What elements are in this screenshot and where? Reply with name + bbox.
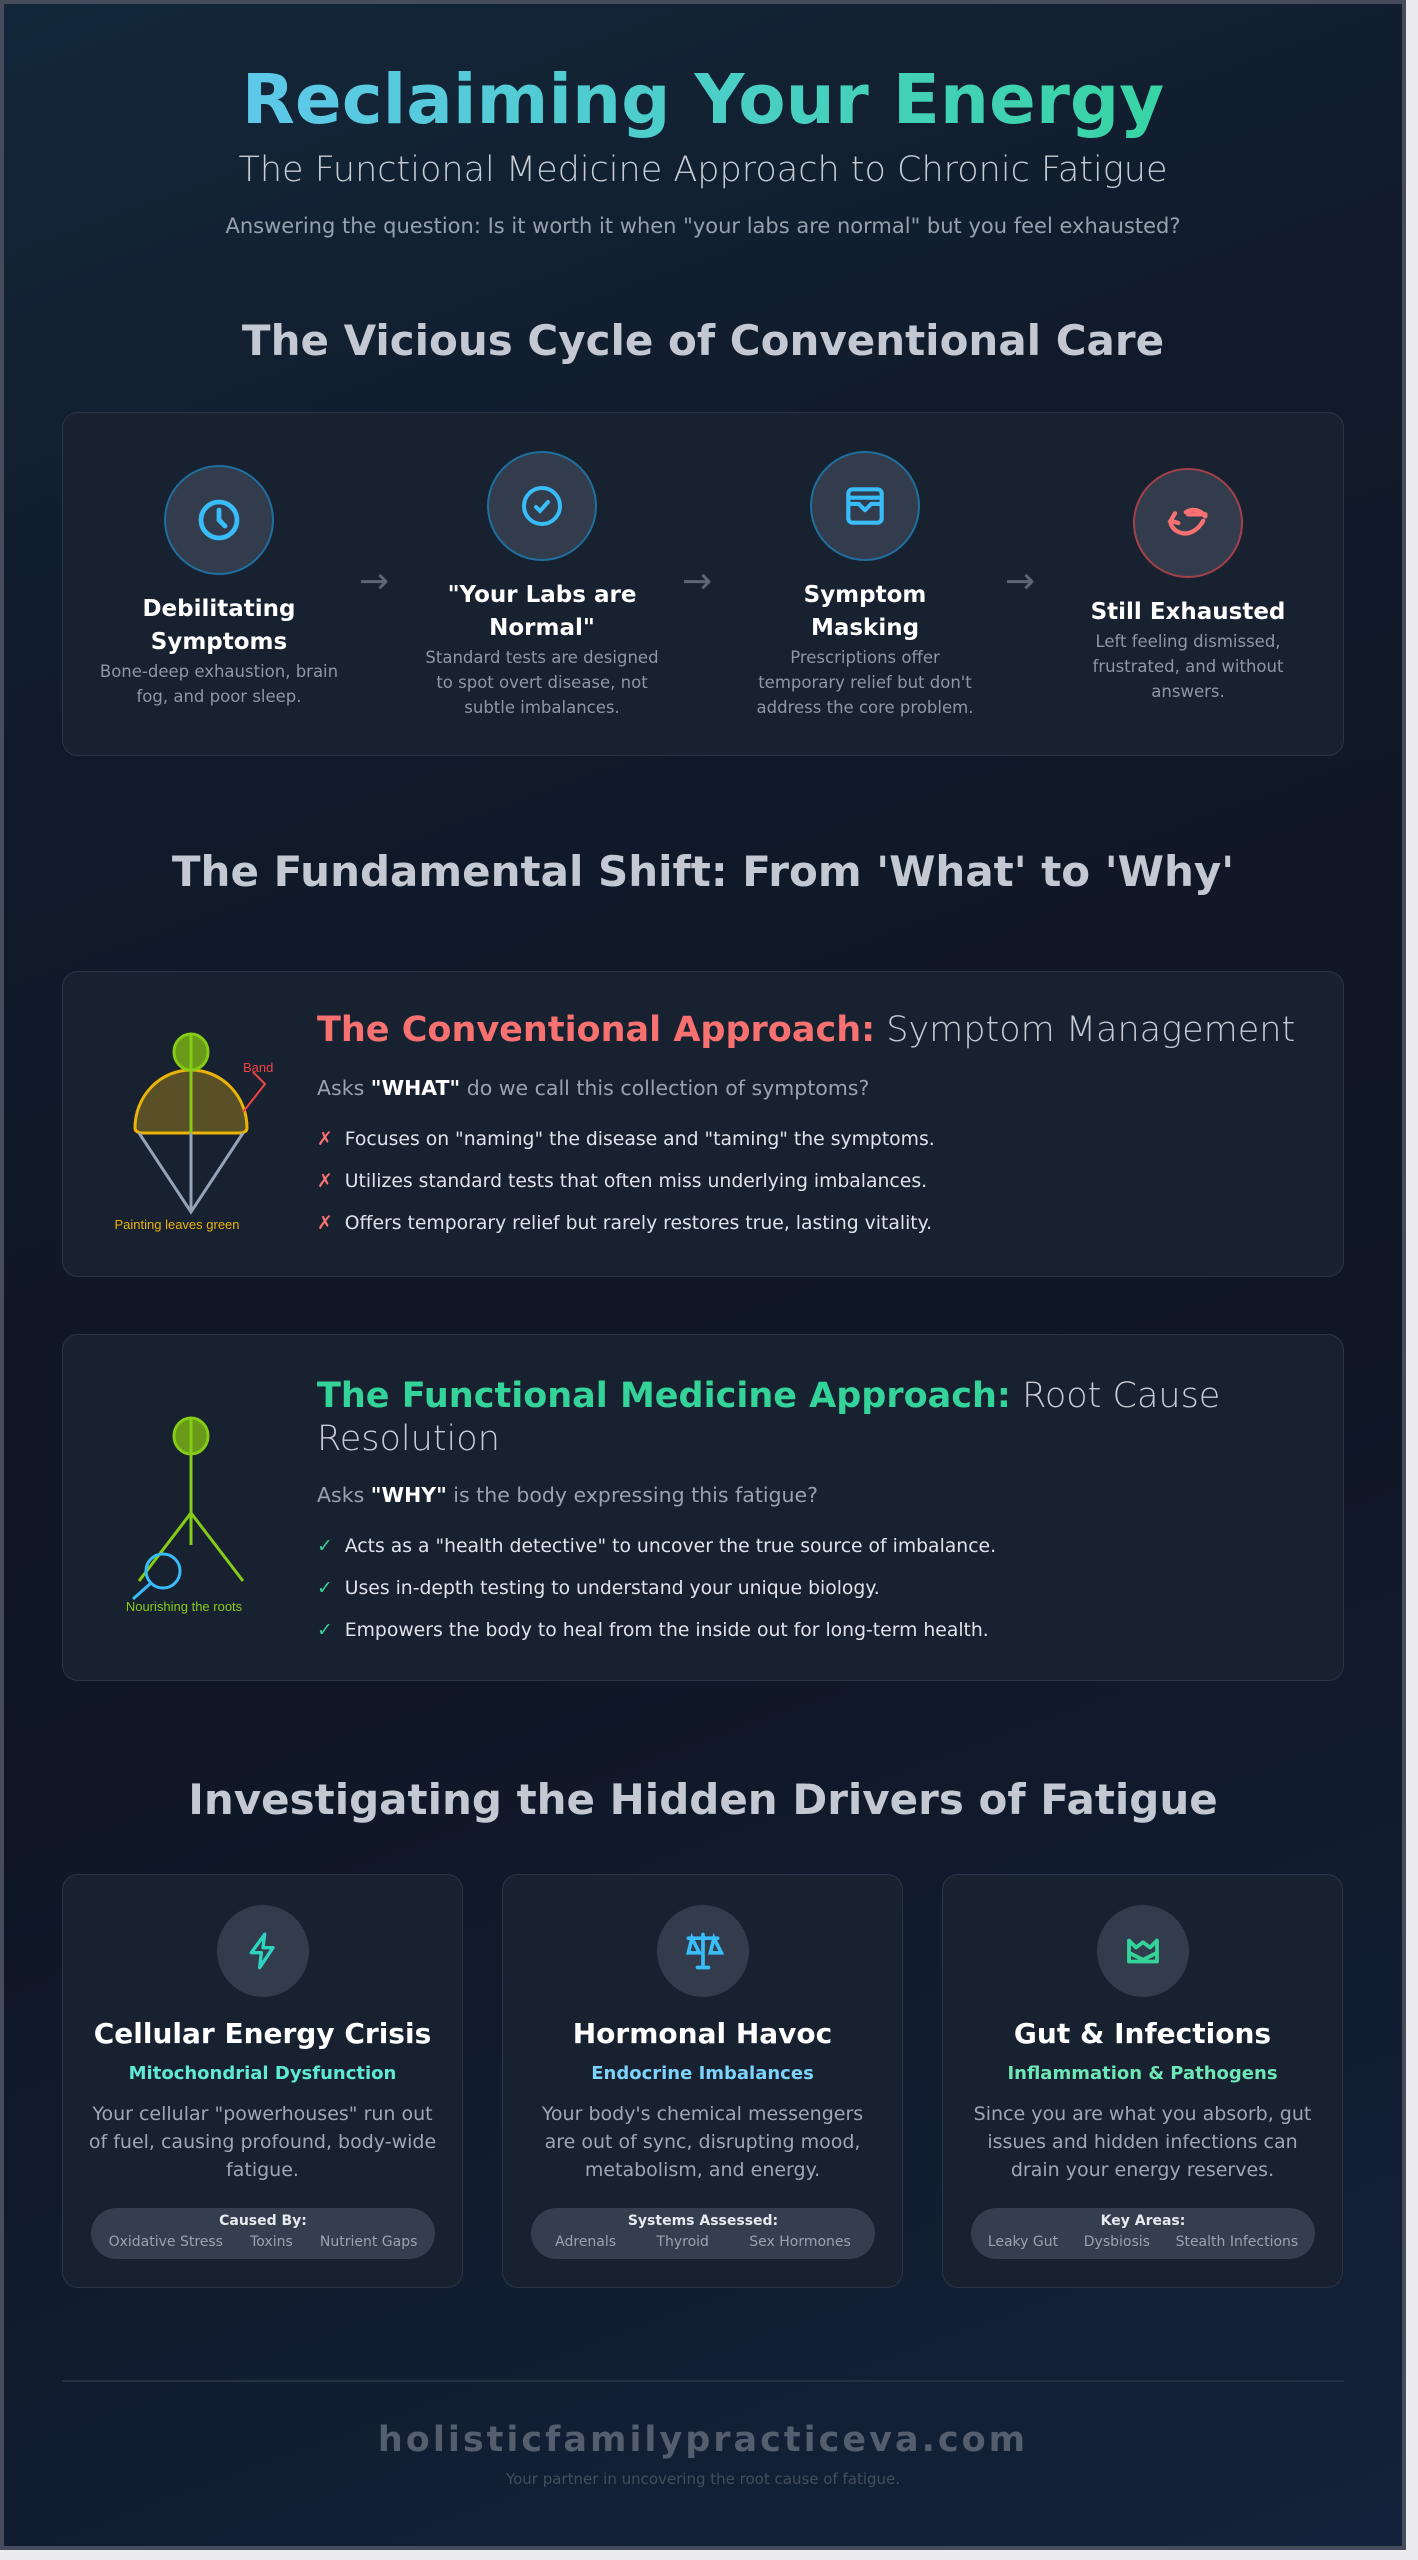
icon: wallet: [810, 451, 920, 561]
card: hormonal: Your body's chemical messengers are out of sync, disrupting mood, metabolism, and energy.: [542, 2103, 863, 2181]
step 2: Normal": [489, 615, 595, 641]
card: gut: Inflammation & Pathogens: [1007, 2063, 1278, 2084]
arrow 3: →: [1005, 561, 1035, 602]
pill: systems: Thyroid: [656, 2234, 709, 2250]
title: Reclaiming Your Energy: [242, 60, 1164, 140]
bullet list: ✓ Uses in-depth testing to understand your unique biology.: [317, 1578, 880, 1599]
footer domain: holisticfamilypracticeva.com: [378, 2420, 1028, 2460]
illustration: painted tree: Painting leaves green: [114, 1217, 240, 1232]
question: Asks "WHAT" do we call this collection of symptoms?: [317, 1076, 869, 1100]
pill: systems: Sex Hormones: [749, 2234, 851, 2250]
illustration: painted tree: [114, 1032, 273, 1232]
bullet list: [317, 1129, 935, 1234]
icon: cycle: [1133, 468, 1243, 578]
icon: bolt: [216, 1905, 308, 1997]
heading: The Functional Medicine Approach: Root Cause Resolution: [317, 1376, 1220, 1459]
pill: systems: Adrenals: [555, 2234, 616, 2250]
arrow 2: →: [682, 561, 712, 602]
subtitle: The Functional Medicine Approach to Chronic Fatigue: [238, 150, 1168, 190]
bullet list: [317, 1536, 996, 1641]
bullet list: ✗ Offers temporary relief but rarely restores true, lasting vitality.: [317, 1213, 932, 1234]
card: gut: Since you are what you absorb, gut issues and hidden infections can drain your energy reserves.: [974, 2103, 1311, 2181]
icon: scale: [656, 1905, 748, 1997]
card: hormonal: Endocrine Imbalances: [591, 2063, 814, 2084]
pill: key areas: Key Areas:: [1101, 2213, 1185, 2229]
illustration: nourished roots: [126, 1416, 244, 1614]
step 4: Still Exhausted: [1091, 599, 1285, 625]
step 3: Prescriptions offer: [790, 648, 940, 667]
bullet list: ✗ Focuses on "naming" the disease and "taming" the symptoms.: [317, 1129, 935, 1150]
card: gut: [942, 1874, 1343, 2288]
step 3: address the core problem.: [757, 698, 973, 717]
pill: key areas: Stealth Infections: [1176, 2234, 1298, 2250]
step 2: "Your Labs are: [448, 582, 636, 608]
pill: systems: [531, 2208, 875, 2259]
step 3: temporary relief but don't: [758, 673, 972, 692]
panel: functional approach: [62, 1334, 1344, 1681]
bullet list: ✓ Empowers the body to heal from the inside out for long-term health.: [317, 1620, 989, 1641]
intro question: Answering the question: Is it worth it when "your labs are normal" but you feel exhausted?: [225, 214, 1181, 238]
step 4: [1091, 468, 1285, 701]
card: cellular energy: Your cellular "powerhouses" run out of fuel, causing profound, body-wide fatigue.: [89, 2103, 436, 2181]
card: cellular energy: [62, 1874, 463, 2288]
card: hormonal: [502, 1874, 903, 2288]
pill: key areas: [971, 2208, 1315, 2259]
panel: conventional approach: [62, 971, 1344, 1277]
step 2: Standard tests are designed to spot overt disease, not subtle imbalances.: [425, 648, 659, 717]
arrow 1: →: [359, 561, 389, 602]
step 2: [425, 451, 659, 717]
bullet list: ✓ Acts as a "health detective" to uncover the true source of imbalance.: [317, 1536, 996, 1557]
step 4: Left feeling dismissed, frustrated, and without answers.: [1093, 632, 1283, 701]
pill: causes: Nutrient Gaps: [320, 2234, 417, 2250]
heading: vicious cycle: The Vicious Cycle of Conventional Care: [242, 316, 1164, 365]
step 1: Symptoms: [151, 629, 287, 655]
pill: key areas: Leaky Gut: [988, 2234, 1058, 2250]
pill: causes: Toxins: [250, 2234, 293, 2250]
step 3: Masking: [811, 615, 919, 641]
pill: causes: Oxidative Stress: [109, 2234, 223, 2250]
icon: check: [487, 451, 597, 561]
icon: gut: [1096, 1905, 1188, 1997]
pill: causes: [91, 2208, 435, 2259]
illustration: nourished roots: Nourishing the roots: [126, 1599, 243, 1614]
step 3: Symptom: [804, 582, 926, 608]
pill: key areas: Dysbiosis: [1084, 2234, 1150, 2250]
pill: systems: Systems Assessed:: [628, 2213, 778, 2229]
illustration: painted tree: Band: [243, 1060, 273, 1075]
bullet list: ✗ Utilizes standard tests that often miss underlying imbalances.: [317, 1171, 927, 1192]
heading: The Conventional Approach: Symptom Management: [317, 1010, 1295, 1050]
icon: clock: [164, 465, 274, 575]
card: cellular energy: Mitochondrial Dysfunction: [129, 2063, 396, 2084]
step 1: Debilitating: [142, 596, 296, 622]
step 1: Bone-deep exhaustion, brain fog, and poor sleep.: [100, 662, 338, 706]
card: cellular energy: Cellular Energy Crisis: [94, 2017, 431, 2050]
card: hormonal: Hormonal Havoc: [573, 2017, 832, 2050]
heading: hidden drivers: Investigating the Hidden Drivers of Fatigue: [188, 1775, 1218, 1824]
footer tagline: Your partner in uncovering the root cause of fatigue.: [506, 2470, 900, 2488]
panel: cycle: [62, 412, 1344, 756]
step 1: [100, 465, 338, 706]
pill: causes: Caused By:: [219, 2213, 307, 2229]
step 3: [757, 451, 973, 717]
heading: fundamental shift: The Fundamental Shift: From 'What' to 'Why': [172, 847, 1234, 896]
card: gut: Gut & Infections: [1014, 2017, 1271, 2050]
question: Asks "WHY" is the body expressing this fatigue?: [317, 1483, 818, 1507]
